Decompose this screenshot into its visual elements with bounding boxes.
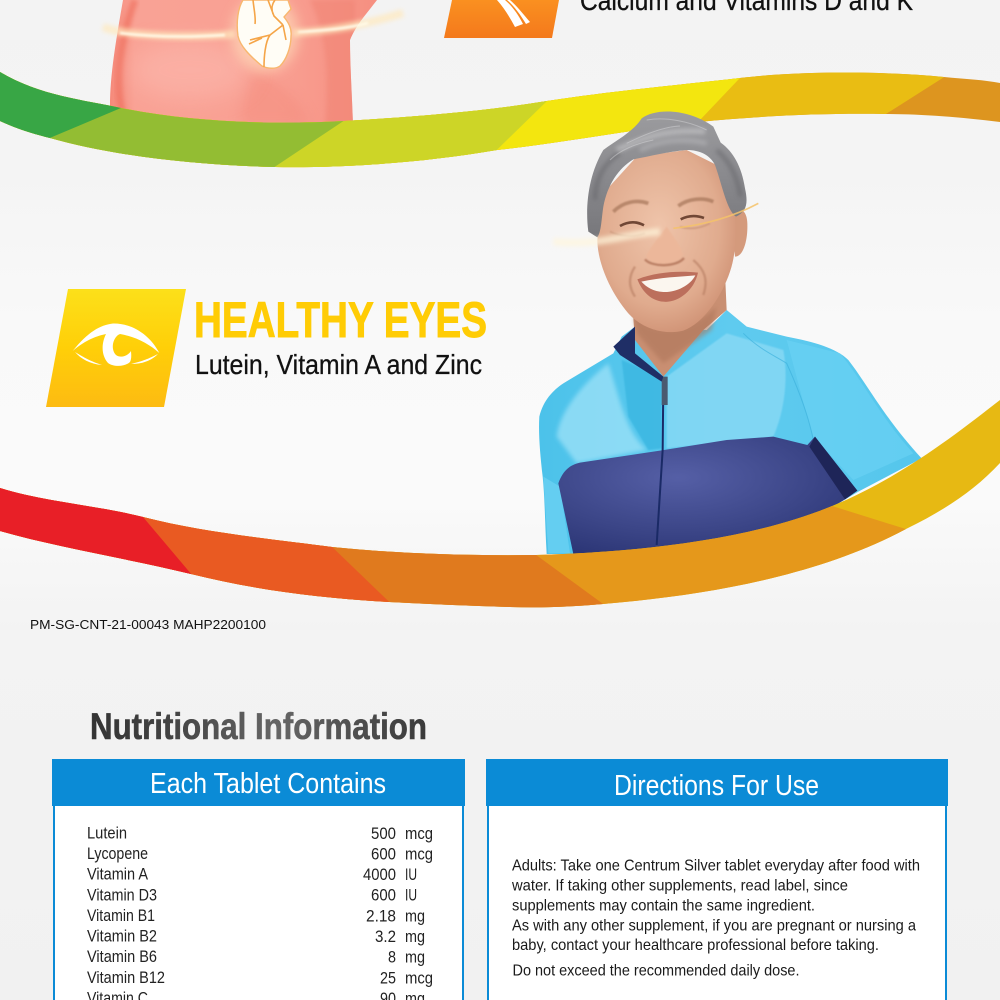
icon: heart [231,0,299,72]
neck [632,273,727,377]
ingredient table: Vitamin B6 [87,947,157,966]
ingredient table: IU [405,865,417,884]
directions text: supplements may contain the same ingredient. [512,898,815,914]
heading: healthy eyes: HEALTHY EYES [194,292,487,348]
ingredient table [87,824,433,1000]
ingredient table: mg [405,906,425,925]
navy panel [558,437,857,554]
directions text: Adults: Take one Centrum Silver tablet everyday after food with [512,858,920,875]
ingredient table: 25 [380,968,396,987]
shirt [539,310,922,554]
ingredient table: mcg [405,824,433,843]
text: product code: PM-SG-CNT-21-00043 MAHP2200100 [30,617,266,632]
ribbon: top wave [0,72,1000,168]
eyes and brows [613,199,713,212]
ingredient table: Lutein [87,824,127,842]
ingredient table: Lycopene [87,844,148,863]
smile [637,272,698,302]
ingredient table: Vitamin A [87,865,149,884]
photo: smiling senior man [539,112,922,554]
ingredient table: IU [405,886,417,905]
ingredient table: 4000 [363,865,396,884]
directions text [511,858,920,980]
panel heading: Each Tablet Contains [150,768,386,800]
badge: healthy eyes icon [46,289,186,407]
icon: orange bone badge [444,0,559,38]
ingredient table: Vitamin B2 [87,927,157,946]
ingredient table: 8 [388,948,396,967]
directions text: As with any other supplement, if you are pregnant or nursing a [512,917,916,934]
ingredient table: 600 [371,886,396,905]
ingredient table: mg [405,948,425,967]
panel heading: Directions For Use [614,770,819,802]
icon: eye [73,323,159,366]
ingredient table: Vitamin B12 [87,968,165,987]
panel: directions for use [486,759,948,1000]
ingredient table: mg [405,927,425,946]
nose [646,227,683,264]
ribbon: bottom wave [0,390,1000,620]
directions text: Do not exceed the recommended daily dose. [512,963,800,980]
panel: each tablet contains [52,759,465,1000]
ingredient table: 3.2 [375,927,396,946]
ingredient table: 600 [371,844,396,864]
ingredient table: 500 [371,824,396,843]
ingredient table: mcg [405,844,433,864]
photo: torso with glowing heart [100,0,403,130]
ingredient table: 2.18 [366,906,396,925]
lens flare across eyes [553,203,758,243]
directions text: water. If taking other supplements, read label, since [511,878,848,895]
icon: halo ring behind heart [103,13,403,37]
face [597,150,736,332]
directions text: baby, contact your healthcare professional before taking. [512,937,879,954]
heading: nutritional information: Nutritional Information [90,706,427,747]
ear [732,210,747,257]
text: lutein vitamin a and zinc: Lutein, Vitamin A and Zinc [195,349,482,380]
ingredient table: Vitamin B1 [87,906,155,925]
ingredient table: mcg [405,968,433,987]
ingredient table: Vitamin D3 [87,885,157,904]
hair [587,112,747,237]
